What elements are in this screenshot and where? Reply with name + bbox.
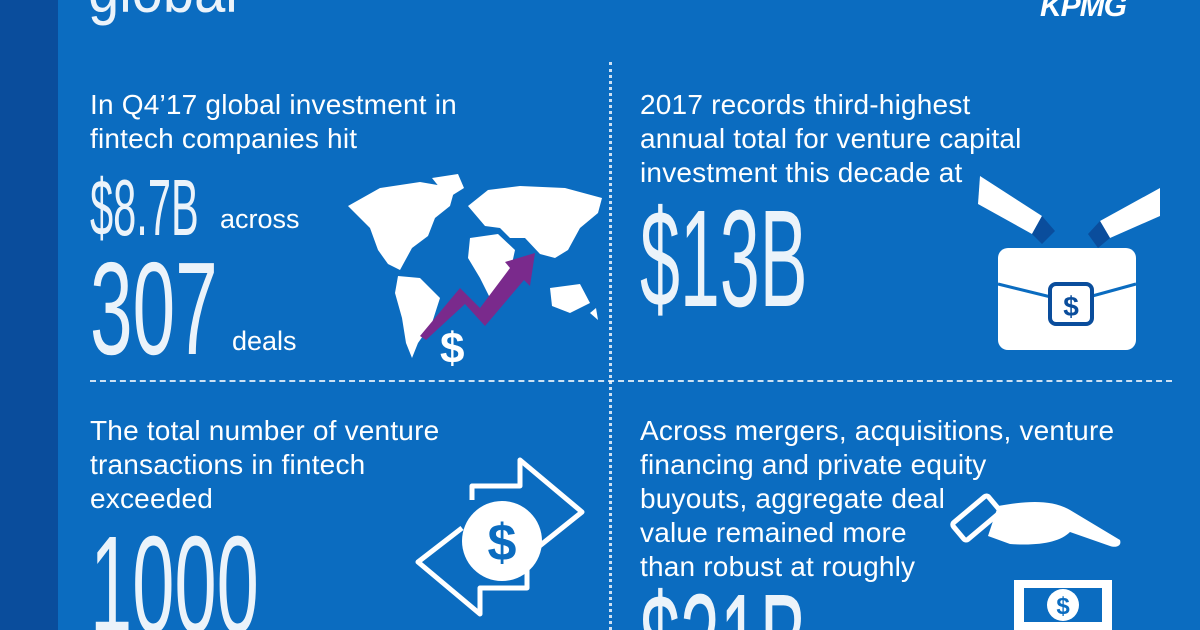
icon: briefcase with handles <box>978 176 1160 350</box>
text block: than robust at roughly <box>640 551 915 582</box>
text block <box>640 89 1022 188</box>
number 8.7B: $8.7B <box>90 163 199 252</box>
icon: exchange arrows with dollar: $ <box>488 514 517 572</box>
number 307: 307 <box>90 235 218 382</box>
text block: annual total for venture capital <box>640 123 1022 154</box>
text block: Across mergers, acquisitions, venture <box>640 415 1114 446</box>
text block <box>640 415 1114 582</box>
panel: 2017 records <box>640 89 1160 350</box>
icon: hand with banknote <box>950 494 1120 630</box>
panel: Q4 investment <box>90 89 602 382</box>
text block <box>90 89 457 154</box>
text block: In Q4’17 global investment in <box>90 89 457 120</box>
panel: aggregate deal value <box>640 415 1120 630</box>
label deals: deals <box>232 326 297 356</box>
text block: investment this decade at <box>640 157 963 188</box>
horizontal divider <box>90 380 1172 382</box>
icon: hand with banknote: $ <box>1056 593 1070 620</box>
icon: briefcase with handles: $ <box>1063 291 1079 322</box>
text block: The total number of venture <box>90 415 439 446</box>
text block: financing and private equity <box>640 449 986 480</box>
text block: exceeded <box>90 483 213 514</box>
text block: value remained more <box>640 517 907 548</box>
panel: venture transactions <box>90 415 584 630</box>
label across: across <box>220 204 300 234</box>
vertical divider <box>609 62 612 630</box>
icon: exchange arrows with dollar <box>416 458 584 616</box>
text block: transactions in fintech <box>90 449 365 480</box>
text block: buyouts, aggregate deal <box>640 483 945 514</box>
number 13B: $13B <box>640 182 808 336</box>
text block: fintech companies hit <box>90 123 357 154</box>
left strip <box>0 0 58 630</box>
text block: 2017 records third-highest <box>640 89 970 120</box>
icon: world map with arrow <box>348 174 602 368</box>
text block <box>90 415 439 514</box>
